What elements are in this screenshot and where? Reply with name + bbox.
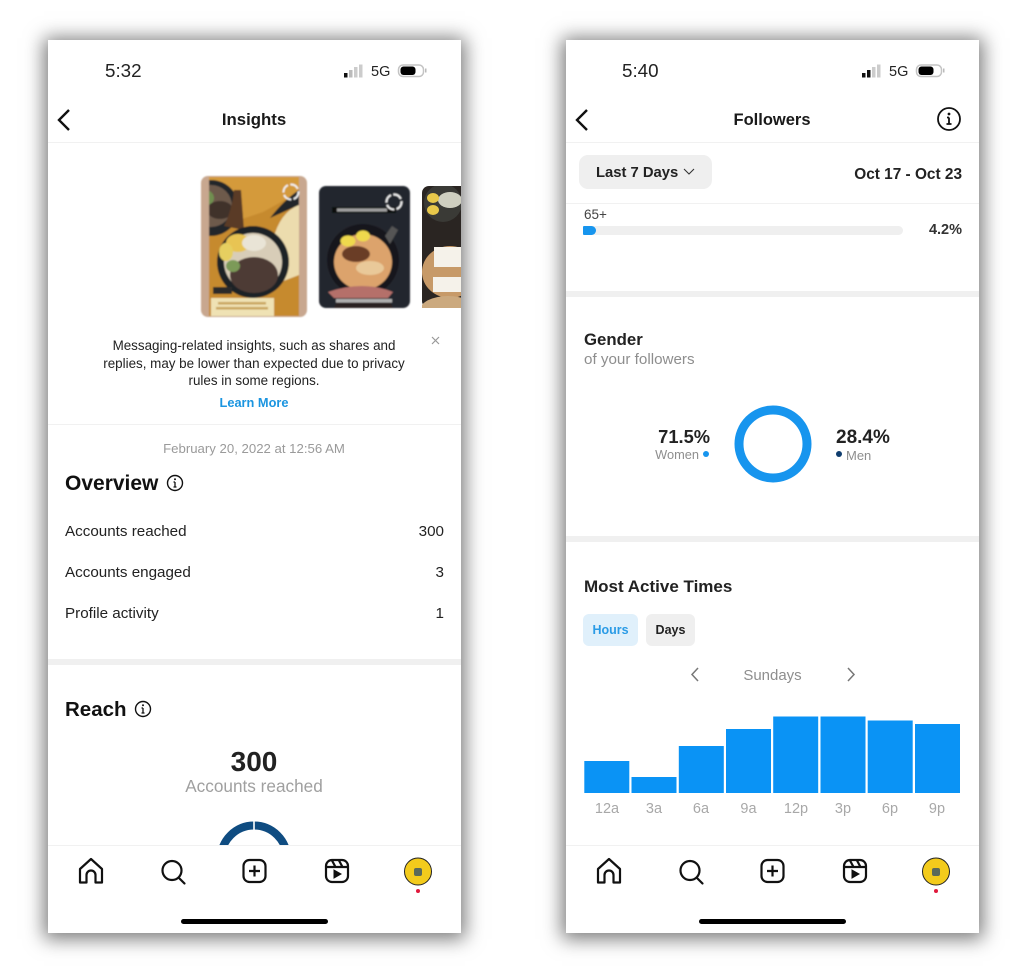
- date range button: [579, 155, 712, 189]
- story 3: [422, 186, 461, 308]
- icon: home: [598, 859, 620, 882]
- home indicator: [699, 919, 846, 924]
- age bar 65+: [583, 207, 962, 238]
- home indicator: [181, 919, 328, 924]
- back arrow: [575, 109, 588, 131]
- previous arrow: [691, 668, 698, 682]
- privacy notice text: Messaging-related insights, such as shares and: [113, 338, 395, 353]
- day label: Sundays: [743, 667, 802, 684]
- back arrow: [57, 109, 70, 131]
- overview metrics: 1: [436, 605, 444, 622]
- reach info icon: [134, 700, 152, 718]
- icon: profile avatar: [404, 858, 432, 893]
- bottom navigation: [78, 858, 432, 924]
- men stat: [836, 427, 890, 463]
- reach label: Accounts reached: [185, 776, 323, 796]
- gender subheading: of your followers: [584, 351, 695, 368]
- women stat: [655, 426, 710, 462]
- gender donut chart: [734, 406, 812, 482]
- privacy notice text: [103, 338, 405, 388]
- status bar signal, network and battery: [862, 64, 944, 80]
- bar chart: 12p: [784, 801, 808, 817]
- bar chart: 12a: [595, 801, 620, 817]
- bar chart: 9a: [740, 801, 757, 817]
- date range: Oct 17 - Oct 23: [854, 166, 962, 183]
- screen title: Followers: [733, 111, 811, 129]
- status bar time: 5:40: [622, 60, 659, 81]
- gender heading: Gender: [584, 330, 643, 349]
- days tab: [646, 614, 695, 646]
- privacy notice text: rules in some regions.: [188, 373, 319, 388]
- story 2: [319, 186, 410, 308]
- overview metrics: Accounts reached: [65, 523, 187, 540]
- bar chart: 9p: [929, 801, 945, 817]
- overview metrics: 3: [436, 564, 444, 581]
- close icon: [432, 336, 440, 344]
- story 1: [200, 175, 308, 318]
- icon: profile avatar: [922, 858, 950, 893]
- status bar time: 5:32: [105, 60, 142, 81]
- icon: add post: [244, 860, 266, 882]
- panel: Insights phone screen: [48, 40, 461, 933]
- bar chart: 6a: [693, 801, 710, 817]
- status bar signal, network and battery: 5G: [371, 64, 390, 80]
- screen title: Insights: [222, 110, 286, 129]
- icon: home: [80, 859, 102, 882]
- learn more link: Learn More: [220, 395, 288, 410]
- privacy notice text: replies, may be lower than expected due to privacy: [103, 356, 405, 371]
- men stat: 28.4%: [836, 427, 890, 448]
- age bar 65+: 4.2%: [929, 222, 962, 238]
- panel: Followers phone screen: [566, 40, 979, 933]
- overview metrics: 300: [419, 523, 444, 540]
- status bar signal, network and battery: [344, 64, 426, 80]
- icon: reels: [844, 860, 866, 882]
- reach heading: Reach: [65, 698, 127, 721]
- days tab: Days: [656, 623, 685, 637]
- hours tab: Hours: [592, 623, 629, 637]
- bar chart: 6p: [882, 801, 898, 817]
- most active times heading: Most Active Times: [584, 577, 732, 596]
- bottom navigation: [596, 858, 950, 924]
- date: February 20, 2022 at 12:56 AM: [163, 441, 345, 456]
- icon: search: [162, 861, 184, 884]
- bar chart: 3a: [646, 801, 663, 817]
- icon: add post: [762, 860, 784, 882]
- women stat: 71.5%: [658, 426, 710, 447]
- date range button: Last 7 Days: [596, 165, 678, 181]
- info icon: [937, 107, 961, 131]
- story thumbnails: [200, 175, 461, 318]
- overview metrics: Accounts engaged: [65, 564, 191, 581]
- icon: reels: [326, 860, 348, 882]
- status bar signal, network and battery: 5G: [889, 64, 908, 80]
- icon: search: [680, 861, 702, 884]
- next arrow: [848, 668, 855, 682]
- reach number: 300: [231, 746, 277, 777]
- overview heading: Overview: [65, 472, 158, 495]
- women stat: Women: [655, 447, 699, 462]
- men stat: Men: [846, 448, 871, 463]
- overview info icon: [166, 474, 184, 492]
- hours tab: [583, 614, 638, 646]
- reach donut chart, partly hidden: [220, 822, 288, 845]
- bar chart: 3p: [835, 801, 851, 817]
- age bar 65+: 65+: [584, 207, 607, 222]
- overview metrics: [65, 523, 444, 622]
- bar chart: [584, 716, 960, 817]
- overview metrics: Profile activity: [65, 605, 159, 622]
